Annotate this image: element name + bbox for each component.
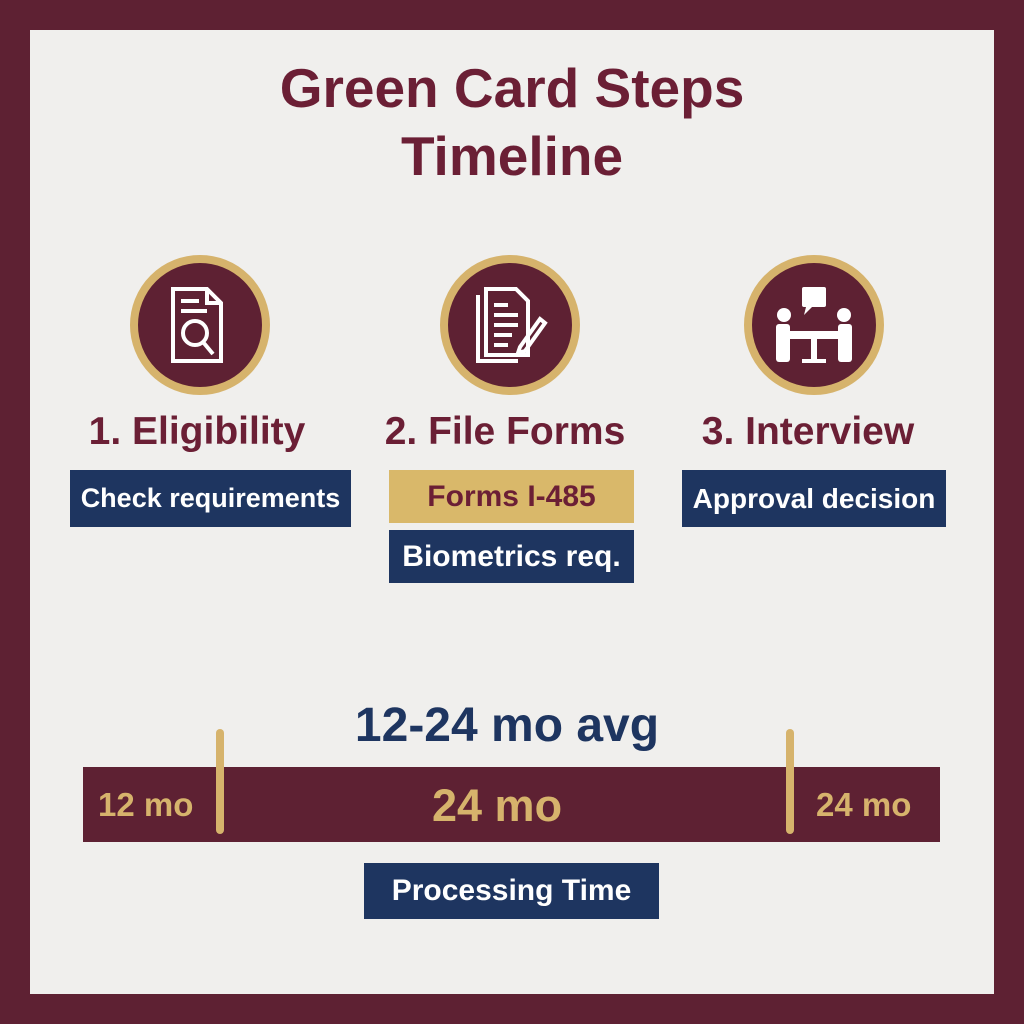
box: forms I-485: Forms I-485 (427, 480, 596, 512)
average label: 12-24 mo avg (355, 699, 659, 752)
timeline bar: 12 mo (98, 786, 193, 823)
title: Green Card Steps (280, 57, 744, 119)
box: biometrics (389, 530, 634, 583)
timeline bar: 24 mo (432, 780, 562, 831)
box: approval decision: Approval decision (693, 482, 935, 514)
timeline bar: 24 mo (816, 786, 911, 823)
icon: forms (440, 255, 580, 395)
title (280, 57, 744, 187)
step 2 label: 2. File Forms (385, 410, 625, 453)
step 3 label: 3. Interview (702, 410, 914, 453)
tick marker left (216, 729, 224, 834)
box: forms I-485 (389, 470, 634, 523)
timeline bar (83, 767, 940, 842)
processing time box: Processing Time (392, 874, 631, 907)
step 1 label: 1. Eligibility (89, 410, 305, 453)
box: approval decision (682, 470, 946, 527)
box: check requirements: Check requirements (81, 483, 340, 513)
box: check requirements (70, 470, 351, 527)
icon: interview (744, 255, 884, 395)
processing time box (364, 863, 659, 919)
tick marker right (786, 729, 794, 834)
icon: eligibility (130, 255, 270, 395)
box: biometrics: Biometrics req. (402, 540, 621, 572)
title: Timeline (401, 125, 623, 187)
